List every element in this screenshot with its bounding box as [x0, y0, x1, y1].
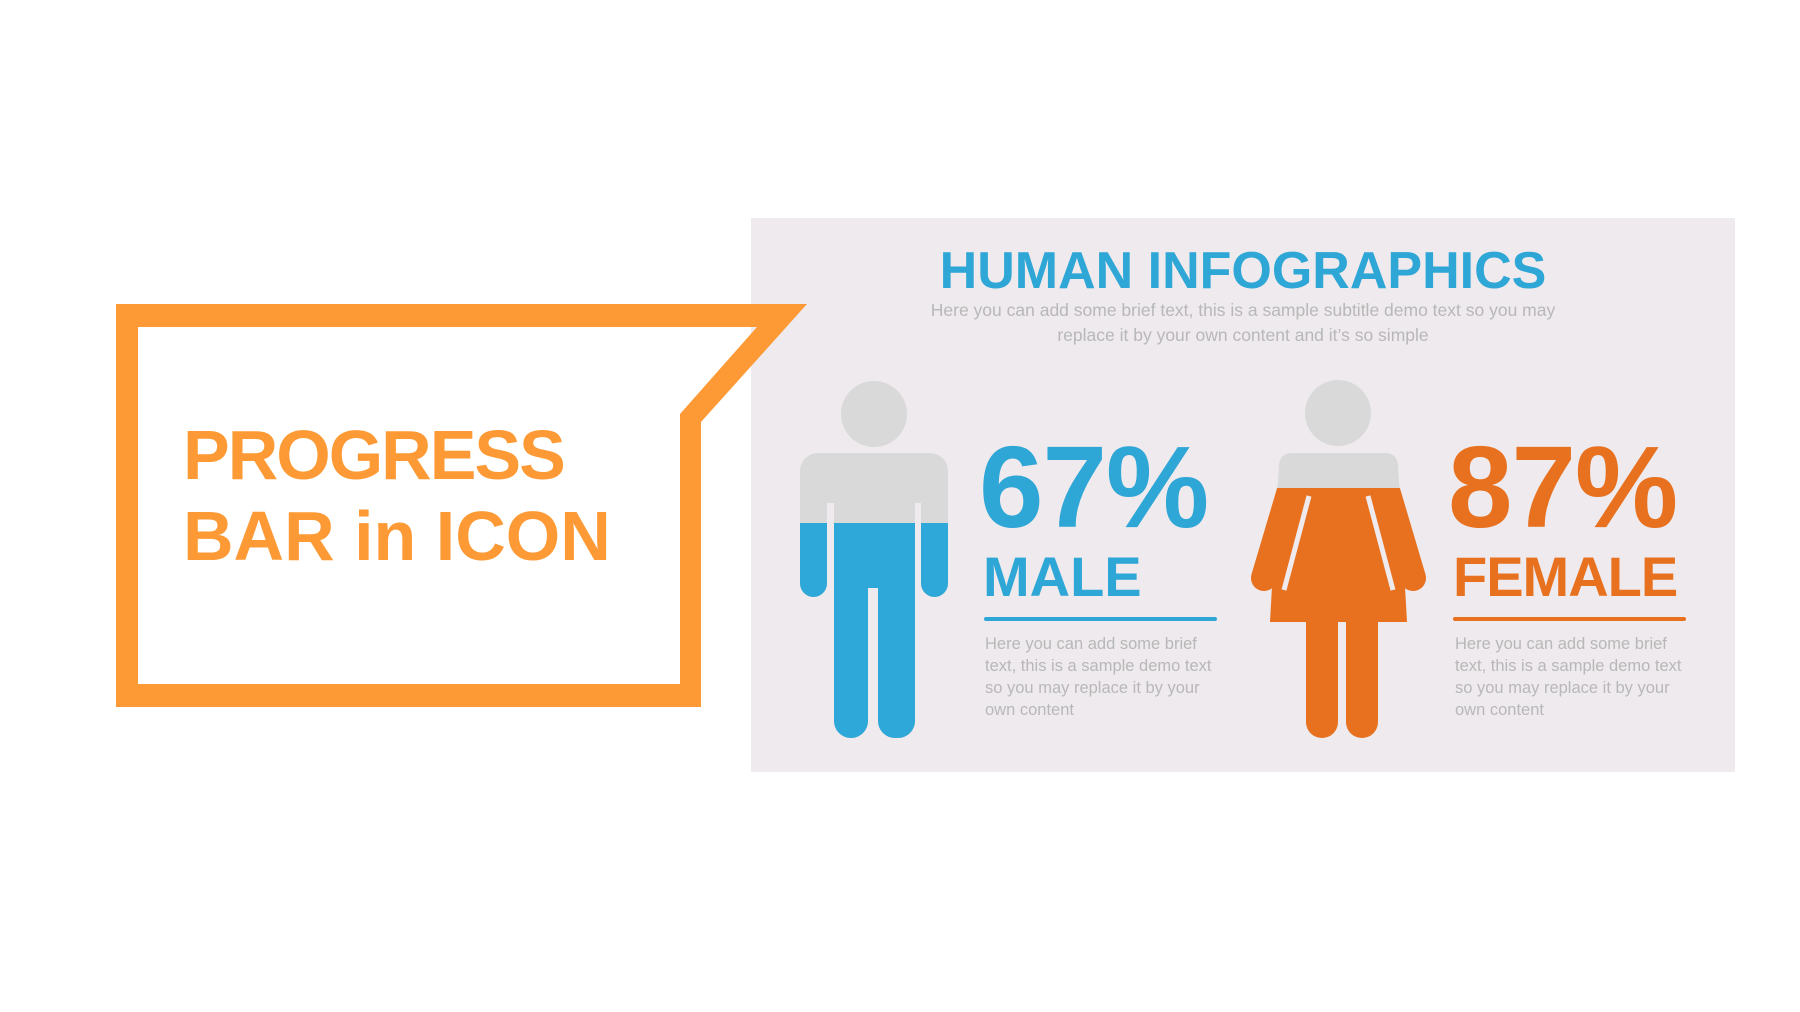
- subtitle: replace it by your own content and it’s so simple: [1057, 325, 1429, 345]
- stat: male 67%: [979, 422, 1217, 719]
- callout heading: BAR in ICON: [183, 497, 611, 575]
- stat: male 67%: own content: [985, 701, 1074, 719]
- callout heading: PROGRESS: [183, 416, 564, 494]
- stat: female 87%: so you may replace it by your: [1455, 679, 1670, 697]
- subtitle: Here you can add some brief text, this is a sample subtitle demo text so you may: [931, 300, 1555, 320]
- stat: male 67%: Here you can add some brief: [985, 635, 1197, 653]
- orange callout frame: [116, 304, 807, 707]
- panel: human infographics background: [751, 218, 1735, 772]
- stat: female 87%: [1448, 422, 1686, 719]
- stat: female 87%: 87%: [1448, 422, 1677, 552]
- icon: male figure progress: [800, 381, 948, 740]
- stat: male 67%: so you may replace it by your: [985, 679, 1200, 697]
- stat: male 67%: text, this is a sample demo text: [985, 657, 1212, 675]
- stat: female 87%: own content: [1455, 701, 1544, 719]
- stat: female 87%: Here you can add some brief: [1455, 635, 1667, 653]
- stat: female 87%: text, this is a sample demo text: [1455, 657, 1682, 675]
- title: HUMAN INFOGRAPHICS: [940, 242, 1546, 300]
- icon: female figure progress: [1264, 380, 1413, 740]
- stat: male 67%: 67%: [979, 422, 1208, 552]
- stat: male 67%: MALE: [983, 545, 1142, 608]
- stat: female 87%: FEMALE: [1453, 545, 1677, 608]
